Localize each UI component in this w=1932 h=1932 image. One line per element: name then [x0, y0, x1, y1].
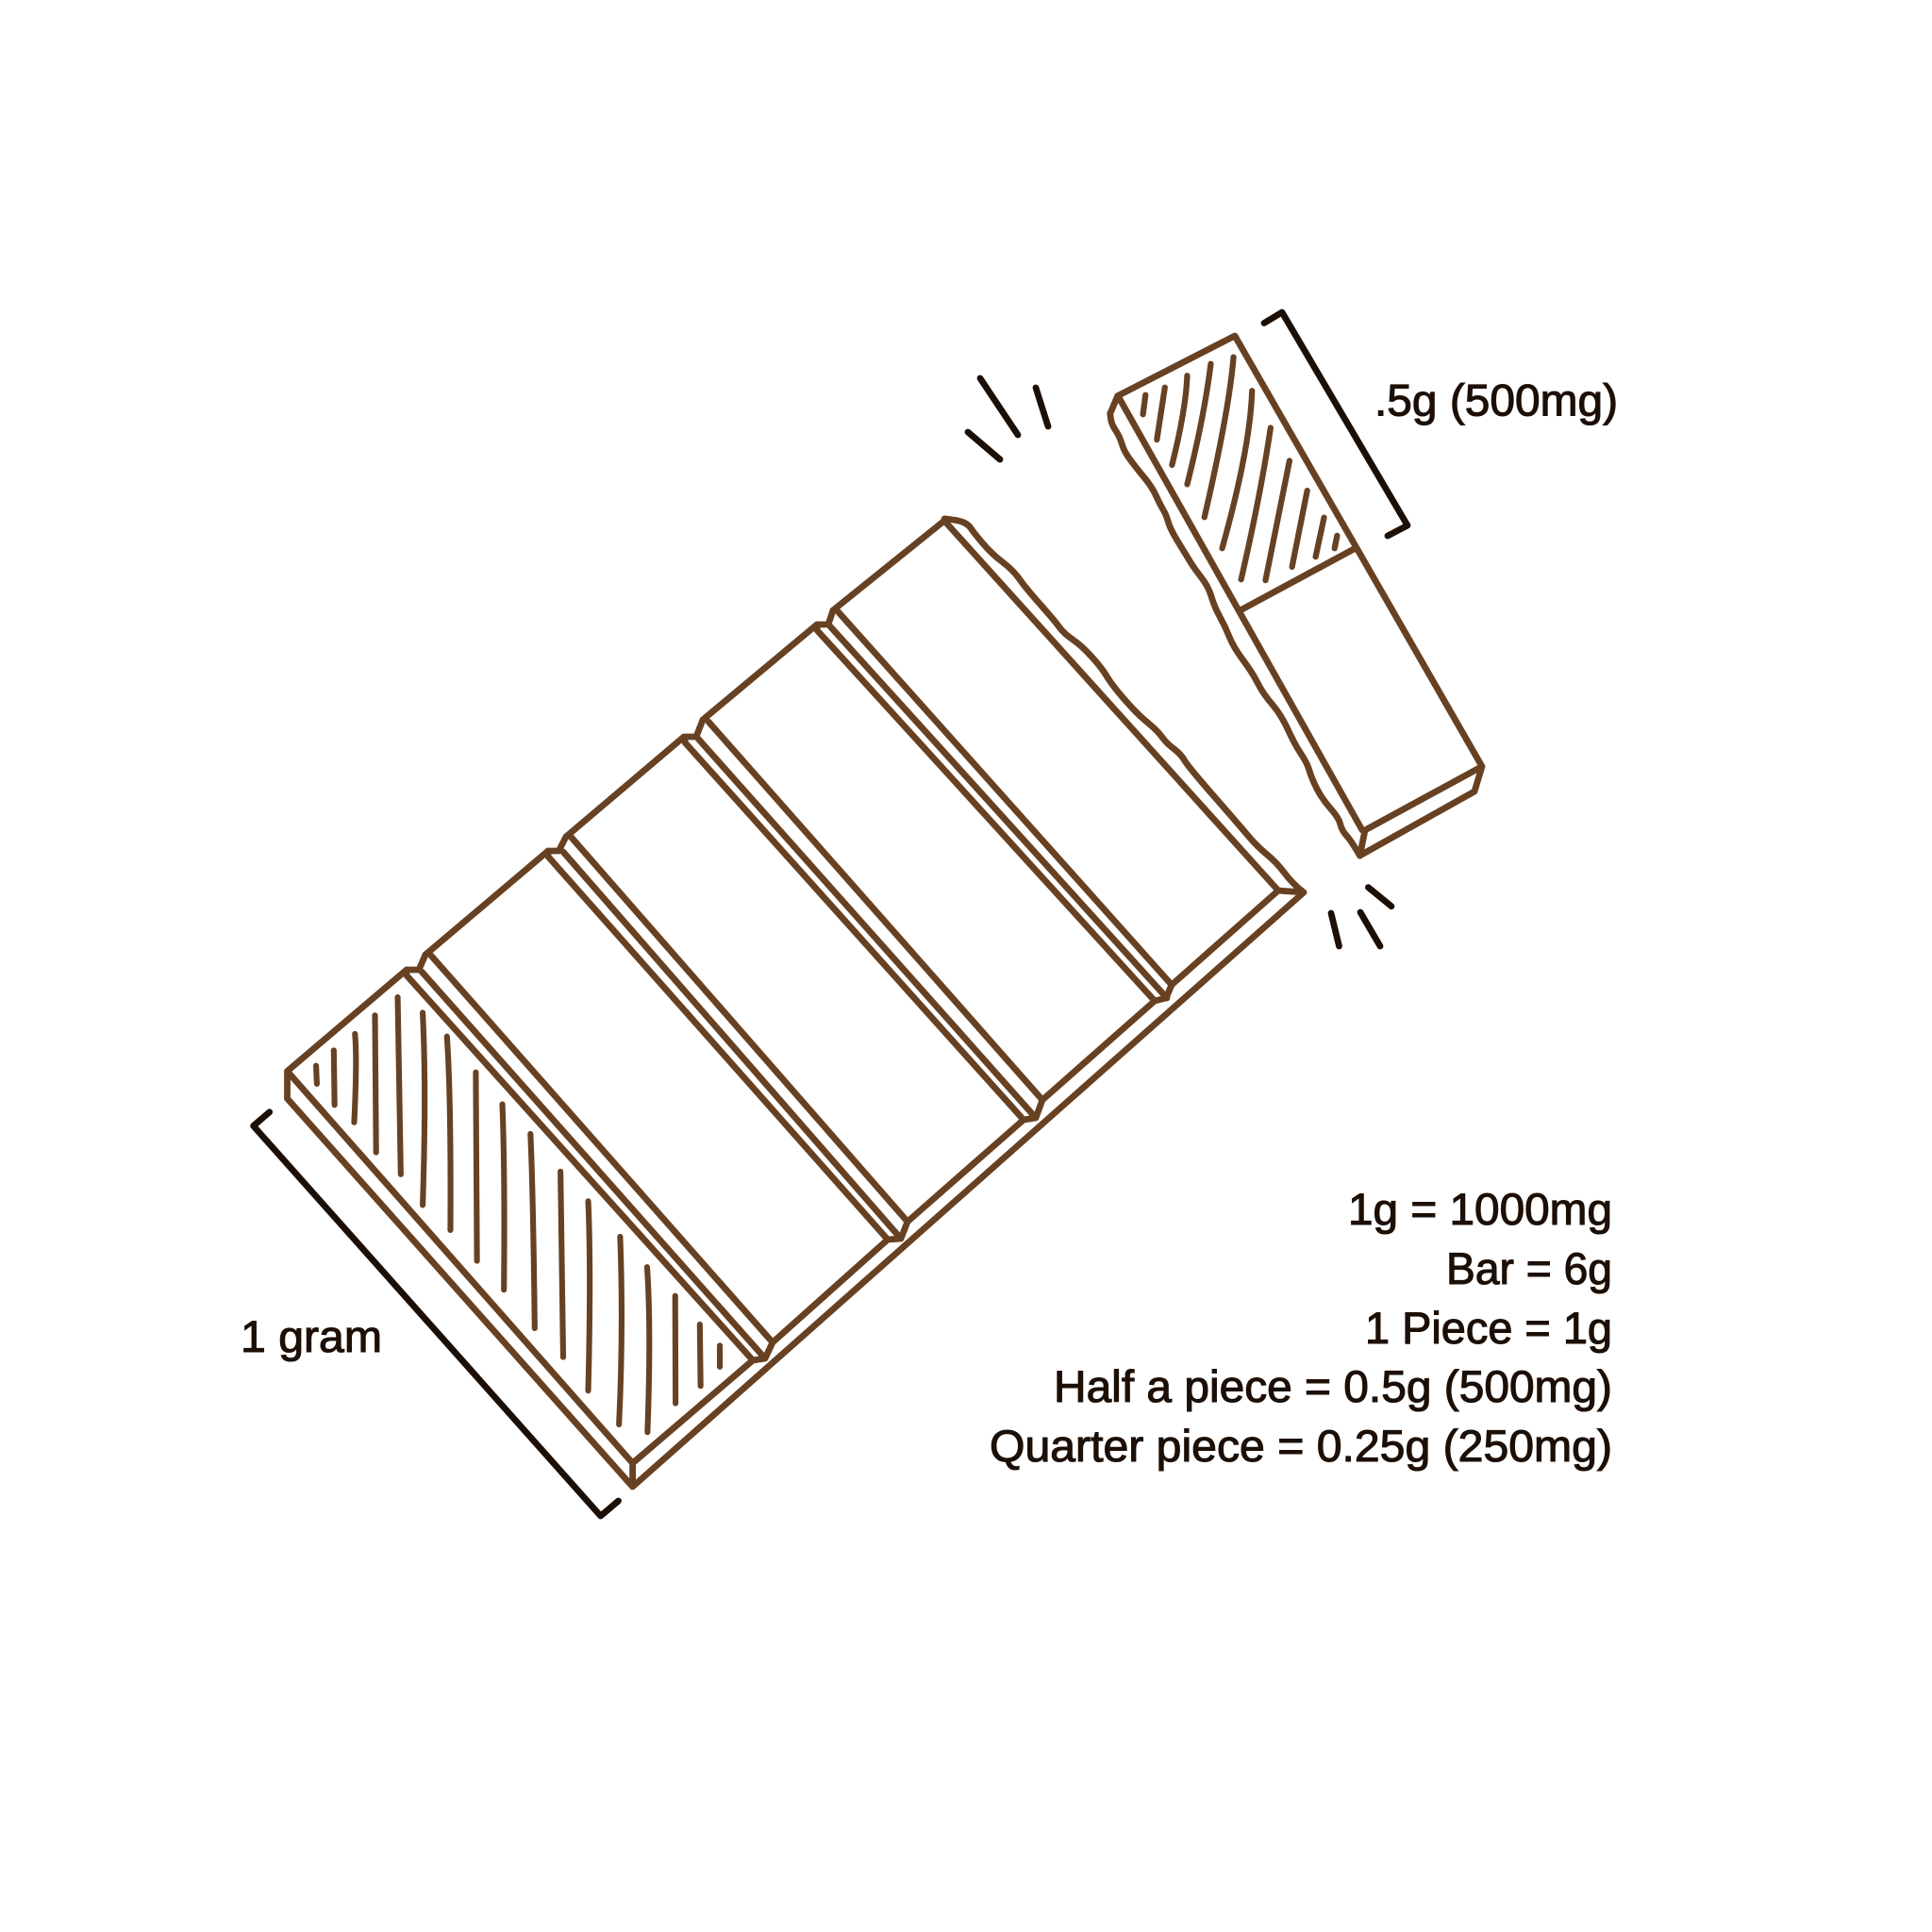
conversion list: Bar = 6g [1446, 1243, 1612, 1293]
break marks lower [1331, 888, 1391, 946]
conversion list: 1 Piece = 1g [1365, 1303, 1612, 1353]
label: one gram: 1 gram [241, 1311, 382, 1361]
fold between pieces 4 and 5 [685, 720, 1042, 1120]
broken-off half piece [1110, 336, 1482, 856]
conversion list: 1g = 1000mg [1348, 1184, 1612, 1234]
label: half piece: .5g (500mg) [1374, 375, 1618, 425]
fold between pieces 2 and 3 [407, 955, 773, 1360]
hatching on half piece [1143, 358, 1337, 580]
fold between pieces 5 and 6 [817, 610, 1172, 1001]
half piece outline [1118, 336, 1482, 856]
chocolate bar [287, 519, 1304, 1487]
conversion list: Quarter piece = 0.25g (250mg) [990, 1421, 1612, 1471]
conversion list: Half a piece = 0.5g (500mg) [1054, 1361, 1612, 1411]
broken edge of bar [944, 519, 1304, 892]
fold between pieces 3 and 4 [548, 837, 908, 1240]
bracket: half piece [1264, 312, 1407, 536]
broken edge of half piece [1110, 396, 1359, 856]
conversion list [990, 1184, 1612, 1471]
bracket: one gram [254, 1112, 619, 1516]
hatching on first piece [316, 997, 720, 1432]
break marks upper [968, 378, 1048, 459]
bar outline [287, 521, 1304, 1487]
